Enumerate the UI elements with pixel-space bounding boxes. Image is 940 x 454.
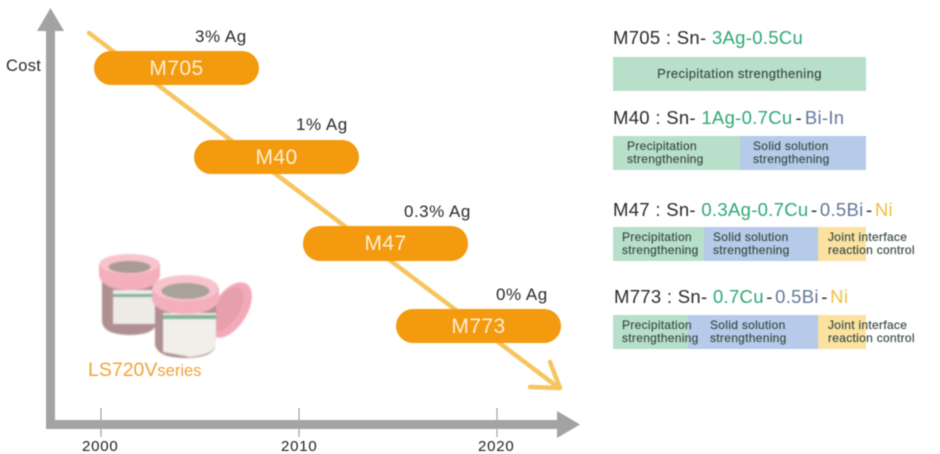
M773 strength bar: strengthening [710,331,787,345]
M47 strength bar: Solid solution [713,230,789,244]
axis label: cost: Cost [6,57,41,75]
M47 strength bar: Precipitation [622,230,692,244]
M705 strength bar [613,57,866,91]
M40 formula: M40 : Sn- 1Ag-0.7Cu - Bi-In [613,107,844,128]
M47 strength bar: strengthening [622,243,699,257]
year ticks [101,408,497,437]
pill: M773 [396,309,561,343]
pill: M705 [94,51,259,85]
label: 3% Ag: 3% Ag [195,27,247,46]
M773 strength bar: strengthening [622,331,699,345]
panel: M773 [612,286,915,350]
front jar [155,305,216,358]
pill: M47 [303,226,468,261]
M40 strength bar: Solid solution [753,139,829,153]
panel: M47: Joint interface [828,230,907,244]
cost trend arrow [89,33,560,388]
M47 strength bar: strengthening [713,243,790,257]
rear jar [102,277,157,335]
pill: M705: M705 [149,57,204,80]
M705 strength bar: Precipitation strengthening [657,66,822,81]
panel: M47: reaction control [828,243,915,257]
M47 strength bar [613,227,866,261]
panel: M47 [612,199,915,262]
label: 1% Ag: 1% Ag [296,115,348,134]
M773 strength bar [613,315,866,349]
panel: M773: reaction control [828,331,915,345]
panel: M705 [612,27,866,92]
open lid [199,275,261,345]
M773 strength bar: Solid solution [710,318,786,332]
M40 strength bar [613,136,866,170]
horizontal time axis [46,411,580,438]
M47 formula: M47 : Sn- 0.3Ag-0.7Cu - 0.5Bi - Ni [613,199,893,220]
pill: M47: M47 [364,232,407,255]
M773 strength bar: Precipitation [622,318,692,332]
M40 strength bar: strengthening [753,152,830,166]
M705 formula: M705 : Sn- 3Ag-0.5Cu [613,27,803,48]
panel: M773: Joint interface [828,318,907,332]
pill: M773: M773 [451,315,506,338]
label: 0.3% Ag: 0.3% Ag [404,202,471,221]
product label: LS720V series: LS720Vseries [88,359,201,381]
vertical cost axis [37,8,64,429]
M40 strength bar: Precipitation [627,139,697,153]
label: 0% Ag: 0% Ag [496,285,548,304]
pill: M40: M40 [255,146,298,169]
panel: M40 [612,107,866,170]
M773 formula: M773 : Sn- 0.7Cu - 0.5Bi - Ni [614,286,848,307]
pill: M40 [194,140,359,174]
M40 strength bar: strengthening [627,152,704,166]
